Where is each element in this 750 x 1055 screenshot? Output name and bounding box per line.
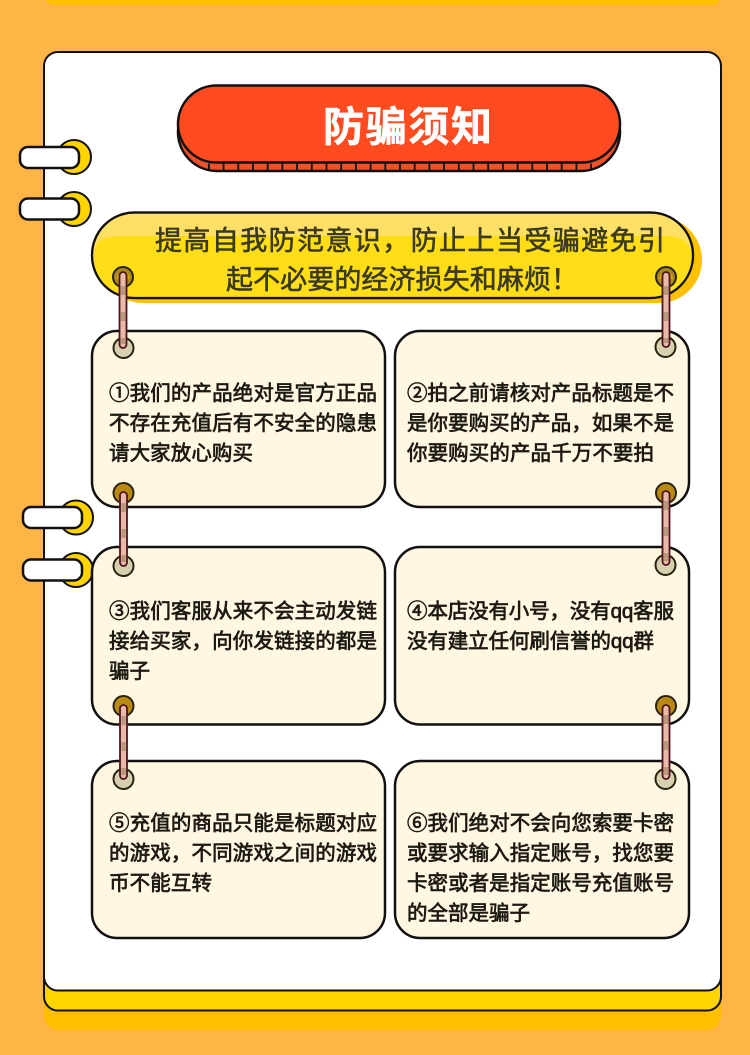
- notice banner: [92, 212, 702, 303]
- card 6: ⑥我们绝对不会向您索要卡密: [407, 812, 674, 835]
- card 1: [92, 331, 385, 507]
- card 4: ④本店没有小号，没有qq客服: [407, 600, 674, 623]
- card 1: 请大家放心购买: [109, 442, 253, 465]
- string: card 4 to card 6: [656, 696, 676, 789]
- string: card 3 to card 5: [114, 696, 134, 789]
- card 6: 的全部是骗子: [407, 902, 530, 925]
- string: card 2 to card 4: [656, 483, 676, 575]
- card 2: [395, 331, 689, 507]
- string: banner to card 2: [656, 267, 676, 357]
- notice banner: 起不必要的经济损失和麻烦！: [226, 265, 578, 295]
- title text: 防骗须知: [323, 104, 492, 150]
- card 5: ⑤充值的商品只能是标题对应: [109, 812, 377, 835]
- title banner: [178, 86, 620, 171]
- card 6: 或要求输入指定账号，找您要: [407, 842, 674, 865]
- string: card 1 to card 3: [114, 483, 134, 576]
- card 2: ②拍之前请核对产品标题是不: [407, 382, 674, 405]
- binder rings lower: [23, 500, 93, 587]
- card 1: ①我们的产品绝对是官方正品: [109, 382, 377, 405]
- card 1: 不存在充值后有不安全的隐患: [109, 412, 377, 435]
- notice text: 提高自我防范意识，防止上当受骗避免引: [155, 226, 665, 256]
- card 2: 是你要购买的产品，如果不是: [407, 412, 674, 435]
- card 4: 没有建立任何刷信誉的qq群: [407, 630, 654, 653]
- card 6: [395, 761, 689, 938]
- top page edge: [45, 0, 720, 5]
- card 3: 骗子: [109, 660, 150, 683]
- card 3: ③我们客服从来不会主动发链: [109, 600, 377, 623]
- card 5: 的游戏，不同游戏之间的游戏: [109, 842, 377, 865]
- card 5: [92, 761, 385, 938]
- card 5: 币不能互转: [109, 872, 212, 895]
- card 3: [92, 547, 385, 724]
- string: banner to card 1: [113, 267, 134, 358]
- card 6: 卡密或者是指定账号充值账号: [407, 872, 674, 895]
- card 3: 接给买家，向你发链接的都是: [109, 630, 377, 653]
- card 4: [395, 547, 689, 724]
- binder rings upper: [20, 140, 91, 226]
- card 2: 你要购买的产品千万不要拍: [407, 442, 654, 465]
